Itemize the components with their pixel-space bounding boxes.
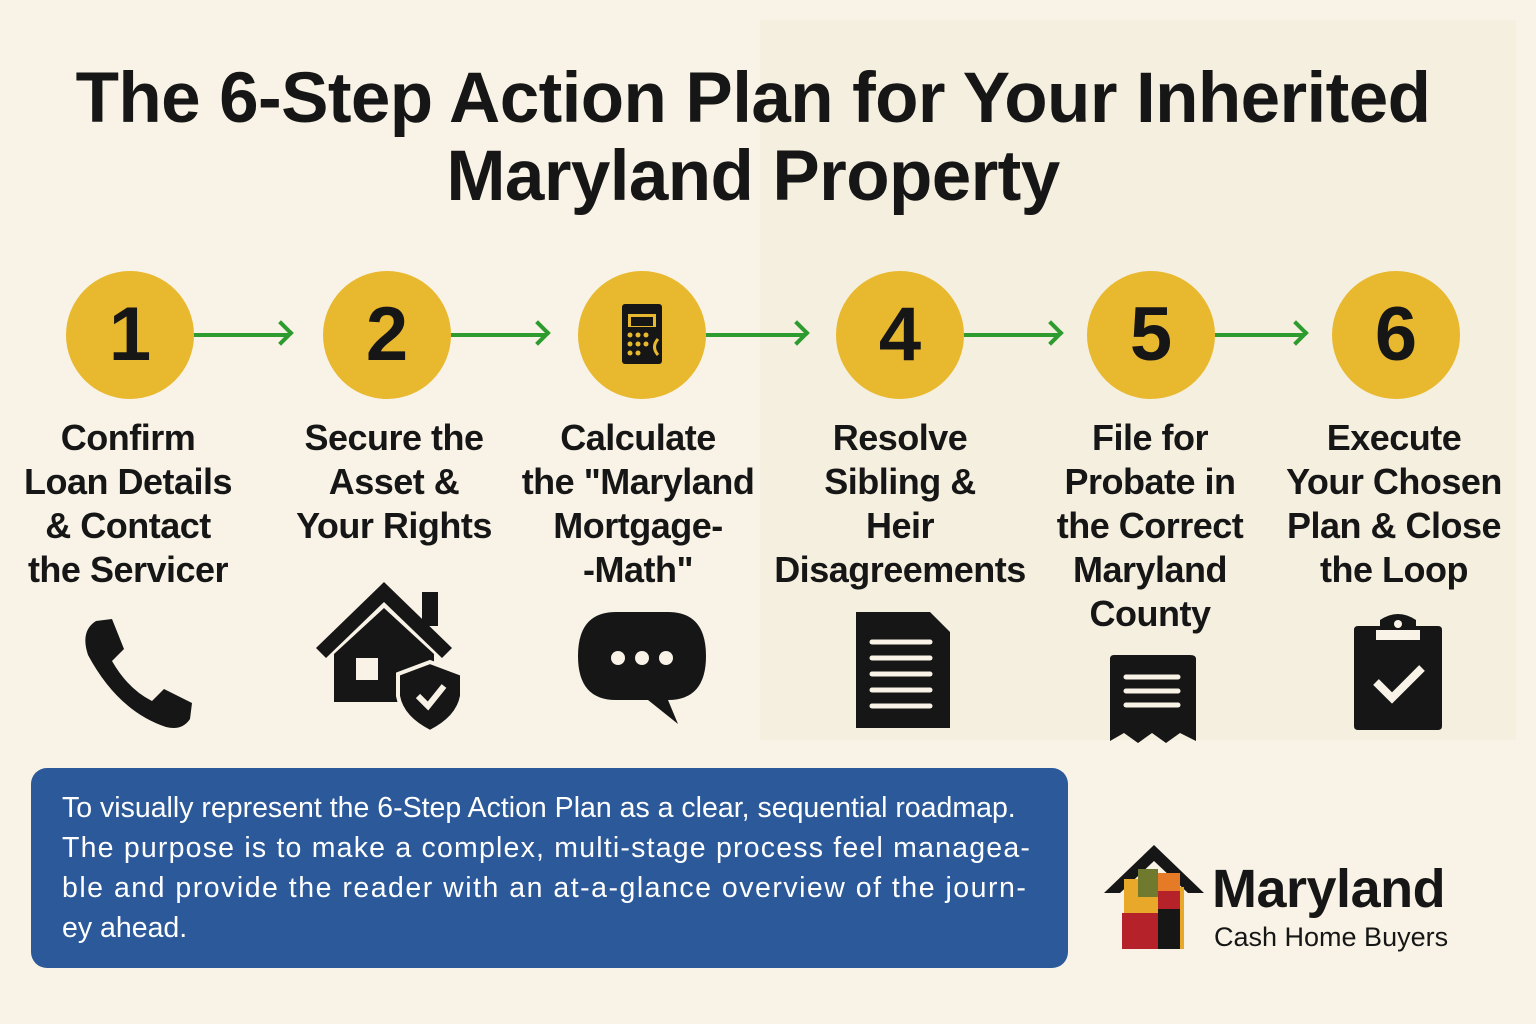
step 5 label: the Correct [1057,505,1243,546]
callout: purpose statement: The purpose is to make a complex, multi-stage process feel managea- [62,832,1031,864]
step 4 label: Sibling & [824,461,976,502]
arrow 1-2 [194,333,288,337]
step 1 label: Loan Details [24,461,232,502]
logo icon: house [1104,845,1204,949]
step 2 label: Secure the [304,417,484,458]
logo text: Maryland [1212,859,1445,919]
arrow 2-3 [451,333,545,337]
arrow 4-5 [964,333,1058,337]
title: The 6-Step Action Plan for Your Inherited [76,59,1430,138]
icon: phone [85,619,192,728]
step 2 circle: 2 [366,292,408,377]
step 6 label: Execute [1327,417,1461,458]
title: Maryland Property [446,137,1060,216]
step 6 circle: 6 [1375,292,1417,377]
step 4 label: Resolve [833,417,967,458]
icon: document [856,612,950,728]
step 4 circle [836,271,964,399]
step 5 label: Probate in [1064,461,1236,502]
background decoration [760,20,1516,740]
step 6 label: Plan & Close [1287,505,1501,546]
icon: clipboard check [1354,614,1442,730]
step 4 label: Heir [866,505,934,546]
icon: house with shield [316,582,460,730]
step 3 circle with calculator icon [578,271,706,399]
logo: Maryland Cash Home Buyers: Cash Home Buyers [1214,922,1448,952]
callout: purpose statement: ble and provide the reader with an at-a-glance overview of the journ- [62,872,1027,904]
step 6 label: the Loop [1320,549,1468,590]
step 6 label: Your Chosen [1286,461,1502,502]
step 3 label: Mortgage- [553,505,723,546]
step 5 circle [1087,271,1215,399]
step 4 circle: 4 [879,292,921,377]
callout: purpose statement: To visually represent the 6-Step Action Plan as a clear, sequential roadmap. [62,792,1016,824]
step 2 label [296,417,492,546]
arrow 5-6 [1215,333,1303,337]
callout: purpose statement: ey ahead. [62,912,187,944]
step 3 label: Calculate [560,417,716,458]
step 2 label: Your Rights [296,505,492,546]
step 1 circle: 1 [109,292,151,377]
step 1 label [24,417,232,590]
step 3 label [522,417,754,590]
title [76,59,1430,216]
step 5 label [1057,417,1244,634]
step 1 label: & Contact [45,505,211,546]
step 6 circle [1332,271,1460,399]
step 5 label: File for [1092,417,1208,458]
step 5 label: Maryland [1073,549,1227,590]
icon: chat bubble [578,612,706,724]
step 3 label: -Math" [583,549,693,590]
step 1 label: the Servicer [28,549,228,590]
callout: purpose statement [31,768,1068,968]
logo: Maryland Cash Home Buyers [1104,845,1448,952]
arrow 3-4 [706,333,804,337]
step 5 circle: 5 [1130,292,1172,377]
step 6 label [1286,417,1502,590]
step 2 circle [323,271,451,399]
step 4 label: Disagreements [774,549,1026,590]
icon: receipt [1110,655,1196,743]
step 5 label: County [1090,593,1210,634]
step 4 label [774,417,1026,590]
step 2 label: Asset & [329,461,459,502]
step 1 label: Confirm [61,417,195,458]
step 1 circle [66,271,194,399]
step 3 label: the "Maryland [522,461,754,502]
